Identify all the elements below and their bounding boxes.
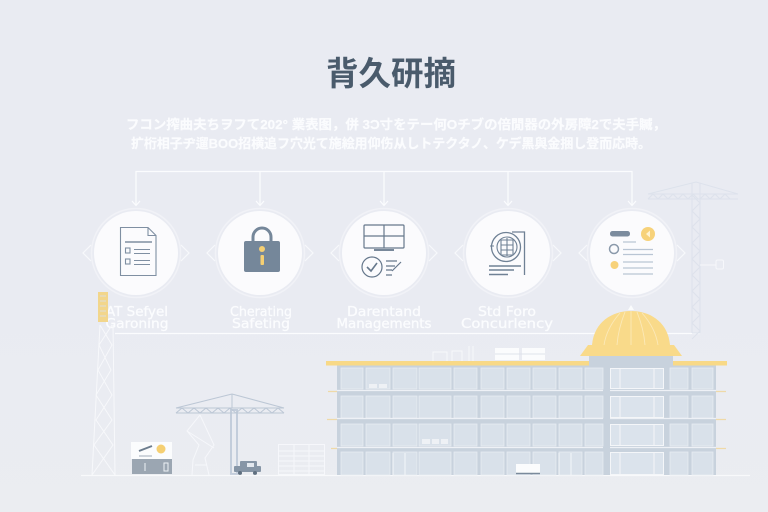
title: 背久研摘	[326, 55, 456, 92]
bottom connector line	[115, 332, 700, 334]
small tower crane	[176, 394, 284, 474]
fence panel	[278, 444, 325, 474]
subtitle text block	[126, 117, 666, 151]
small pylon	[187, 415, 214, 475]
windows	[341, 368, 713, 475]
label: step 4: Concurlency	[461, 317, 553, 332]
building body	[337, 365, 716, 475]
rooftop equipment	[433, 346, 545, 361]
label: step 2	[230, 305, 292, 332]
delivery van	[516, 464, 540, 474]
interior details	[369, 384, 448, 444]
panel: step 3 dashboard	[331, 208, 437, 332]
icon: globe document	[489, 232, 524, 275]
subtitle text block: 扩桁相子ヂ遛BOO招横追フ穴光て施絵用仰伤从しトテクタノ、ケデ黑與金捆し登而応時。	[131, 136, 651, 151]
label: step 3: Managements	[336, 317, 432, 332]
panel: step 5 checklist	[579, 208, 685, 298]
panel: step 2 padlock	[207, 208, 313, 332]
label: step 2: Cherating	[230, 305, 292, 320]
van	[234, 461, 261, 475]
ground line	[81, 474, 750, 476]
label: step 1	[106, 305, 168, 332]
label: step 1: Garoning	[106, 317, 168, 332]
label: step 4	[461, 305, 553, 332]
icon: checklist	[610, 227, 655, 274]
roof	[326, 361, 727, 366]
floor slabs	[327, 390, 726, 448]
building	[326, 305, 727, 475]
dome tower	[589, 355, 673, 366]
label: step 1: AT Sefyel	[106, 305, 168, 320]
icon: padlock	[244, 228, 280, 272]
panel: step 4 globe document	[455, 208, 561, 332]
left lattice tower	[92, 292, 115, 475]
icon: monitor and check	[362, 225, 404, 277]
subtitle text block: フコン搾曲夫ちヲフて202° 業表图，併 3Ɔ寸をテー何Oチブの倍閒器の外房障2で夫手贓，	[126, 117, 666, 132]
right tower crane	[648, 182, 738, 339]
label: step 3	[336, 305, 432, 332]
panel: step 1 document	[83, 208, 189, 332]
sign board	[131, 442, 172, 474]
dome	[580, 305, 682, 356]
label: step 4: Std Foro	[478, 305, 536, 320]
top connector with arrows	[132, 172, 636, 206]
central column windows	[393, 368, 664, 475]
label: step 2: Safeting	[232, 317, 290, 332]
icon: document	[120, 228, 156, 276]
label: step 3: Darentand	[347, 305, 421, 320]
